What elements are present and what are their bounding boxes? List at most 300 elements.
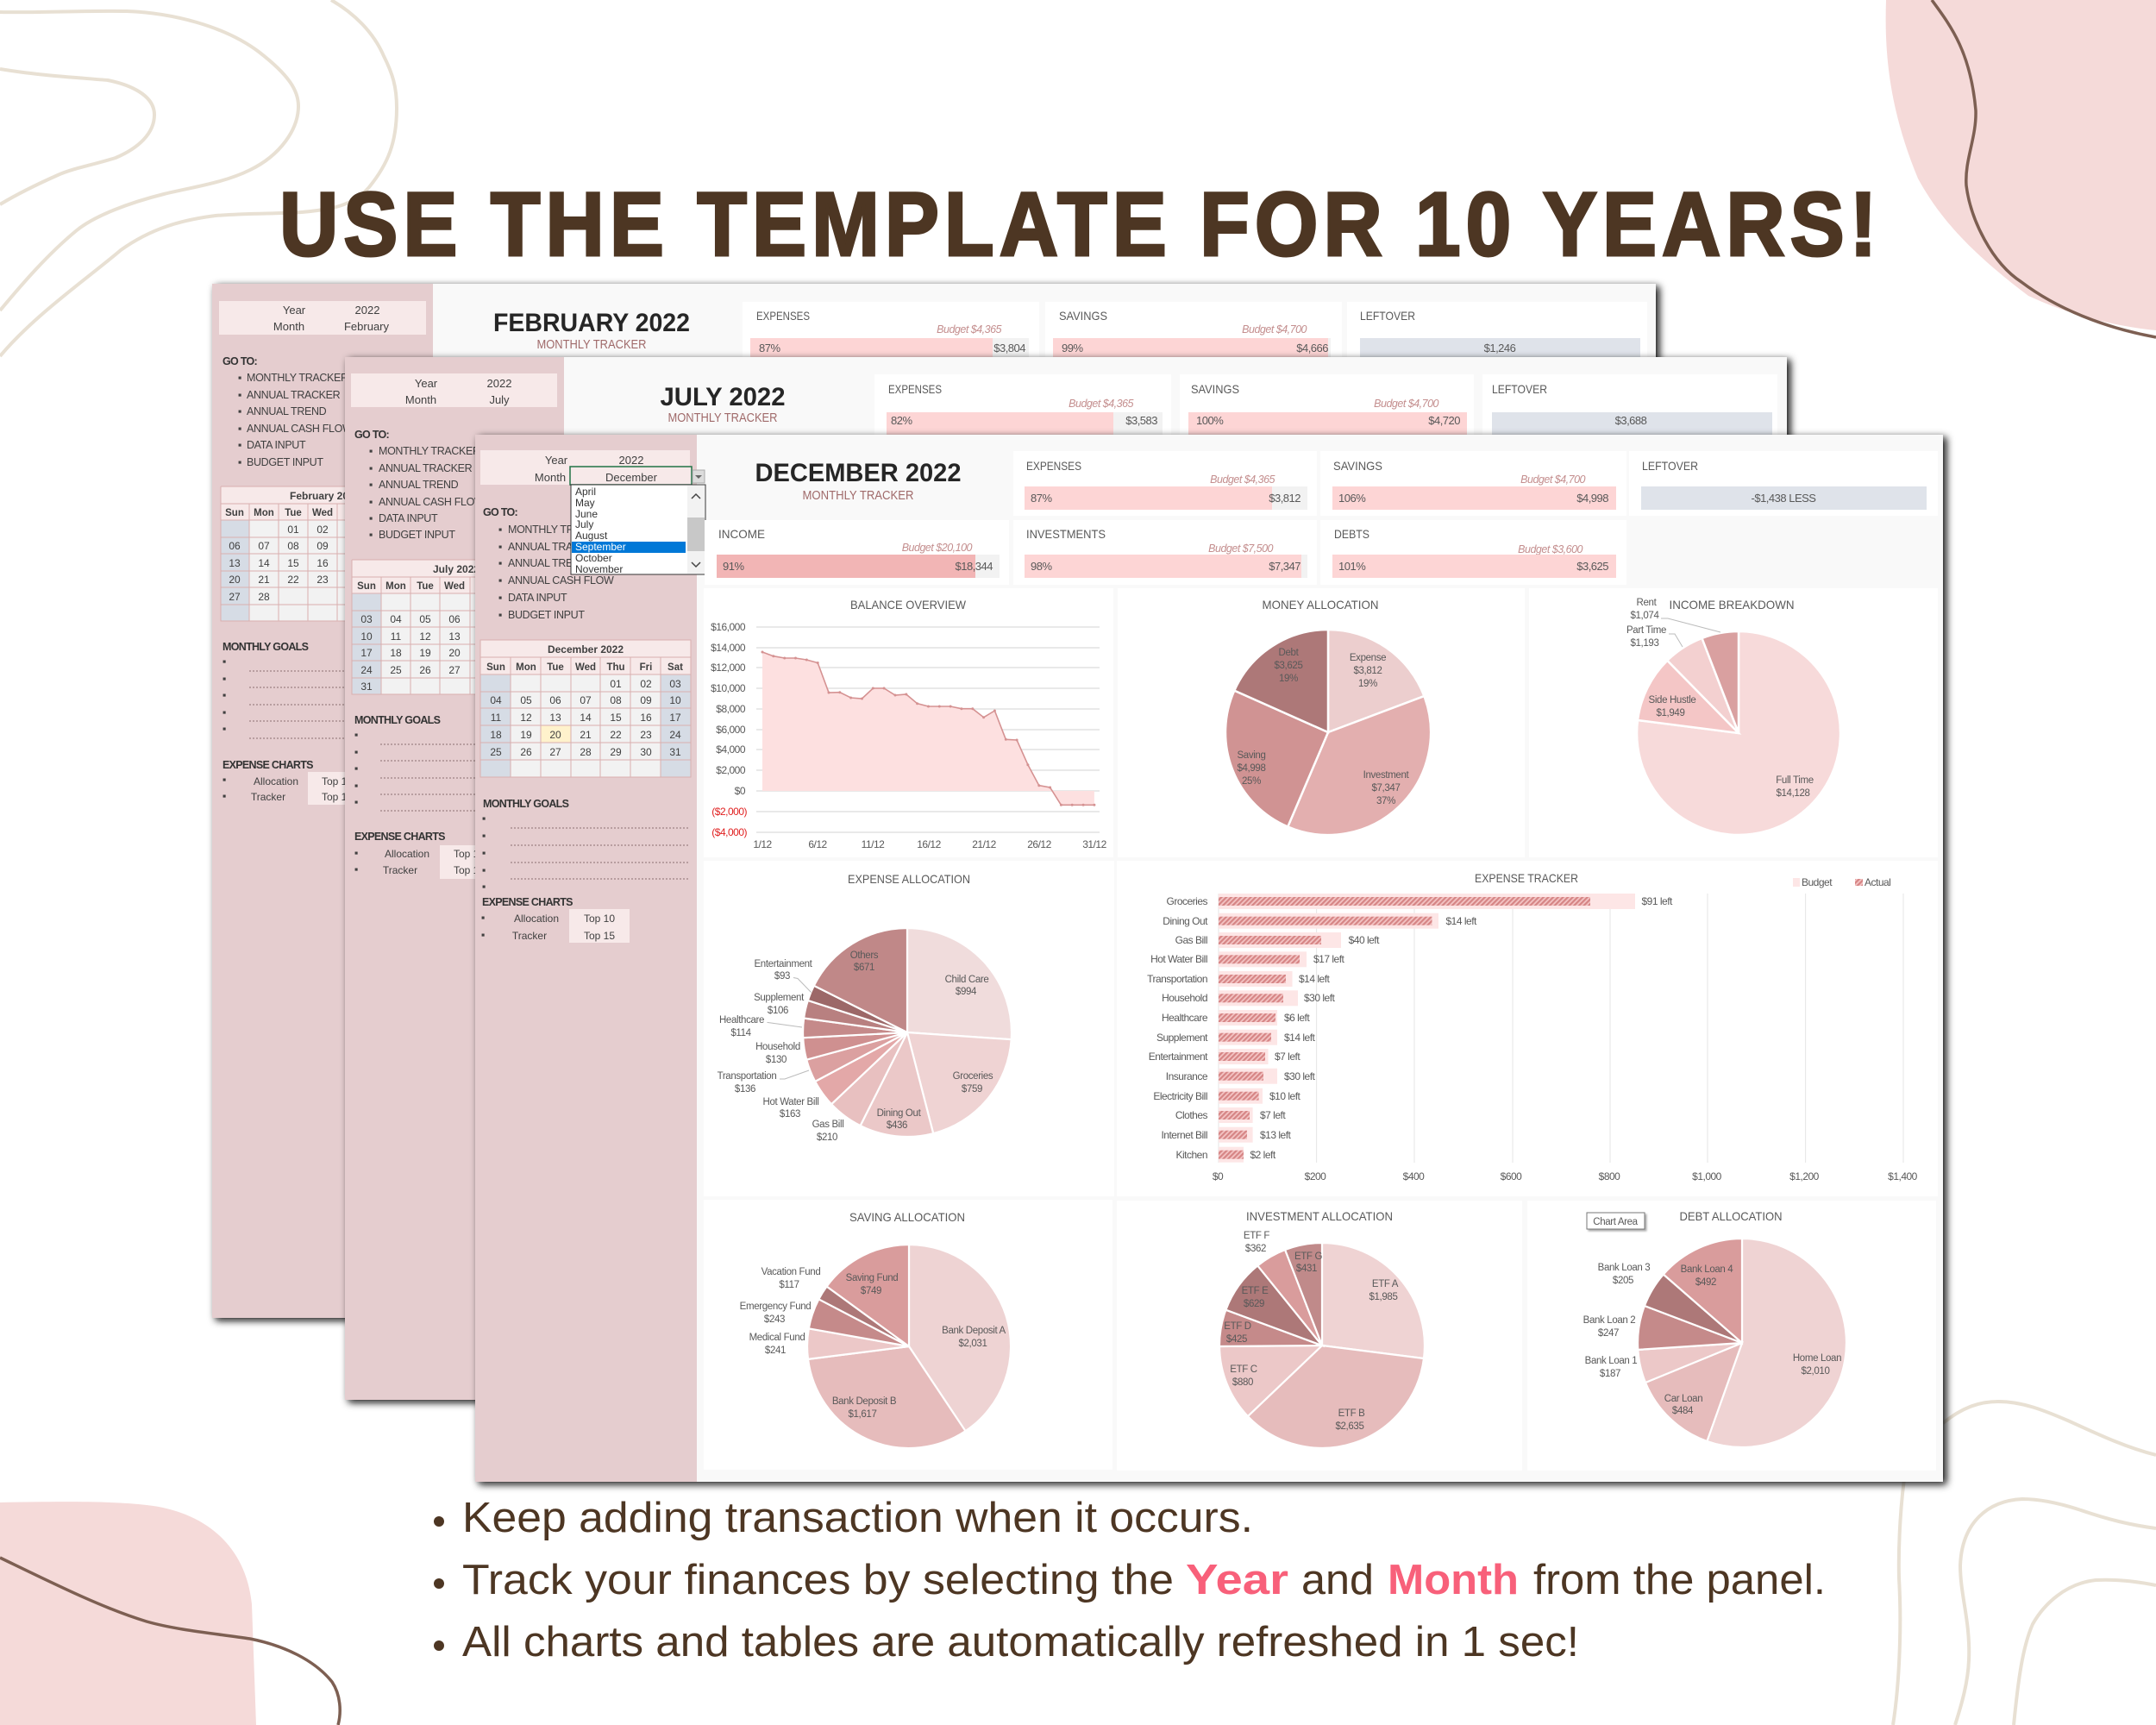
expense labels: $163 <box>780 1109 800 1120</box>
balance y axis: $2,000 <box>716 764 746 776</box>
saving labels: $1,617 <box>848 1409 877 1420</box>
february goals and expense charts links: ▪ <box>222 689 226 701</box>
july goals and expense charts links: MONTHLY GOALS <box>354 714 441 726</box>
february sidebar: ANNUAL CASH FLOW <box>247 423 353 435</box>
july sidebar: ▪ <box>369 462 373 474</box>
july KPI cards: EXPENSES <box>888 382 942 396</box>
bullet 2 <box>434 1557 1826 1603</box>
expense labels: Household <box>755 1042 800 1052</box>
tracker x axis: $1,400 <box>1888 1170 1918 1182</box>
card: savings: Budget $4,700 <box>1520 474 1586 486</box>
tracker category labels: Hot Water Bill <box>1150 953 1207 965</box>
july KPI cards: 100% <box>1196 414 1224 427</box>
tracker legend: Budget <box>1802 876 1833 888</box>
income labels: $1,949 <box>1656 708 1685 718</box>
february calendar: 28 <box>258 591 270 603</box>
balance y axis: ($2,000) <box>711 806 747 818</box>
tracker category labels: Dining Out <box>1163 915 1208 927</box>
expense charts links <box>481 896 630 943</box>
chart: money allocation: MONEY ALLOCATION <box>1263 598 1378 612</box>
chart: income breakdown <box>1529 588 1938 857</box>
expense labels: $994 <box>956 987 977 997</box>
february sidebar: ANNUAL TRACKER <box>247 389 341 401</box>
december calendar: 02 <box>640 678 652 690</box>
february goals and expense charts links: Tracker <box>251 791 285 803</box>
february goals and expense charts links <box>222 641 354 805</box>
july calendar: 26 <box>419 664 431 676</box>
monthly goals: ▪ <box>482 812 486 825</box>
december calendar: 03 <box>669 678 681 690</box>
expense labels: $106 <box>768 1006 788 1016</box>
debt labels: $2,010 <box>1801 1366 1830 1377</box>
card: expenses: $3,812 <box>1269 492 1300 505</box>
tracker category labels: Internet Bill <box>1161 1129 1207 1141</box>
expense labels: $136 <box>735 1084 755 1095</box>
background: bottom left pink blob <box>0 1502 256 1725</box>
february calendar: 08 <box>287 540 299 552</box>
card: savings: 106% <box>1338 492 1366 505</box>
saving labels: $117 <box>779 1280 799 1290</box>
income labels <box>1626 598 1814 799</box>
expense charts links: ▪ <box>481 929 485 941</box>
february sidebar: Month <box>273 320 304 333</box>
february goals and expense charts links: Top 10 <box>322 775 353 787</box>
july sidebar: ▪ <box>369 512 373 524</box>
july sidebar: MONTHLY TRACKER <box>379 445 480 457</box>
balance y axis: $16,000 <box>711 621 746 633</box>
card: expenses <box>1013 451 1317 516</box>
february calendar: 15 <box>287 557 299 569</box>
card: income: INCOME <box>718 527 765 541</box>
expense labels: $759 <box>962 1084 982 1095</box>
money labels: Debt <box>1279 648 1300 658</box>
tracker amount left labels: $7 left <box>1260 1109 1286 1121</box>
tracker amount left labels: $6 left <box>1284 1012 1310 1024</box>
card: investments <box>1013 520 1317 585</box>
december calendar: 31 <box>669 746 681 758</box>
tracker amount left labels: $30 left <box>1304 992 1336 1004</box>
tracker amount left labels: $40 left <box>1349 934 1380 946</box>
december sidebar <box>475 435 697 1482</box>
july KPI cards: $3,688 <box>1615 414 1647 427</box>
card: expenses: EXPENSES <box>1026 459 1081 473</box>
february calendar: 20 <box>229 574 241 586</box>
february calendar: 21 <box>258 574 270 586</box>
february sidebar: 2022 <box>355 304 379 317</box>
chart: expense tracker <box>1117 861 1938 1196</box>
chart area tooltip: Chart Area <box>1593 1217 1639 1227</box>
july calendar: Wed <box>444 581 465 592</box>
december calendar: 12 <box>520 712 532 724</box>
february KPI cards: 99% <box>1062 342 1083 354</box>
saving labels: Vacation Fund <box>761 1267 820 1277</box>
december calendar: Thu <box>606 662 625 673</box>
card: savings: SAVINGS <box>1333 459 1382 473</box>
card: investments: Budget $7,500 <box>1208 543 1274 555</box>
february goals and expense charts links: ▪ <box>222 656 226 668</box>
tracker amount left labels: $14 left <box>1284 1032 1316 1044</box>
tracker category labels: Insurance <box>1166 1070 1208 1082</box>
tracker x axis: $800 <box>1599 1170 1620 1182</box>
july sidebar: ▪ <box>369 445 373 457</box>
expense labels: $671 <box>854 963 874 973</box>
july calendar: 19 <box>419 647 431 659</box>
tracker category labels: Household <box>1162 992 1207 1004</box>
year and month selector: December <box>605 471 658 484</box>
chart: saving allocation <box>704 1200 1112 1470</box>
july calendar: 03 <box>360 613 373 625</box>
panel: December 2022 sheet <box>475 435 1943 1482</box>
july calendar: 11 <box>391 630 402 643</box>
december calendar: 05 <box>520 694 532 706</box>
expense labels: Entertainment <box>754 959 813 969</box>
july sidebar: ▪ <box>369 529 373 541</box>
card: expenses: Budget $4,365 <box>1210 474 1275 486</box>
july KPI cards <box>874 374 1777 435</box>
debt labels: $205 <box>1613 1276 1633 1286</box>
tracker legend <box>1793 876 1890 888</box>
balance x axis: 31/12 <box>1082 838 1107 850</box>
february KPI cards: LEFTOVER <box>1360 309 1415 323</box>
expense labels: $114 <box>730 1028 752 1038</box>
debt pie <box>1638 1239 1846 1447</box>
expense labels: Groceries <box>953 1071 993 1082</box>
saving labels: Bank Deposit B <box>832 1396 897 1407</box>
february goals and expense charts links: ▪ <box>222 790 226 802</box>
tracker amount left labels: $7 left <box>1275 1051 1300 1063</box>
expense labels: Hot Water Bill <box>763 1097 818 1107</box>
february calendar: 27 <box>229 591 241 603</box>
expense labels: Transportation <box>718 1071 776 1082</box>
expense labels <box>718 950 993 1143</box>
bullet 2: Year <box>1186 1557 1288 1603</box>
balance y axis: $6,000 <box>716 724 746 736</box>
february KPI cards: $4,666 <box>1296 342 1328 354</box>
background: bottom right beige contour lines <box>1893 1402 2156 1725</box>
february sidebar: DATA INPUT <box>247 439 306 451</box>
income labels: $14,128 <box>1776 788 1810 799</box>
year and month selector: 2022 <box>619 454 643 467</box>
go to links: ANNUAL TREND <box>508 557 588 569</box>
july goals and expense charts links: Top 10 <box>454 848 485 860</box>
december calendar: 11 <box>491 712 502 724</box>
bullet 2: Track your finances by selecting the <box>462 1557 1174 1603</box>
investment pie <box>1219 1243 1425 1448</box>
july calendar: 17 <box>360 647 373 659</box>
december calendar: 08 <box>610 694 622 706</box>
july sidebar: Month <box>405 393 436 406</box>
card: savings: $4,998 <box>1576 492 1608 505</box>
background: bottom left brown curve <box>0 1558 340 1725</box>
saving labels: Emergency Fund <box>740 1302 811 1312</box>
card: debts: $3,625 <box>1576 560 1608 573</box>
panel: July 2022 sheet <box>345 357 1787 1400</box>
december calendar: 04 <box>490 694 502 706</box>
february sidebar <box>212 284 433 1318</box>
tracker x axis: $600 <box>1501 1170 1522 1182</box>
july goals and expense charts links: Top 15 <box>454 864 485 876</box>
income leader lines <box>1661 618 1720 647</box>
february calendar <box>221 486 360 621</box>
february sidebar: MONTHLY TRACKER <box>247 372 348 384</box>
july KPI cards: $4,720 <box>1428 414 1460 427</box>
december title block <box>755 459 961 503</box>
december calendar: Fri <box>640 662 652 673</box>
debt labels: Bank Loan 1 <box>1585 1356 1637 1366</box>
chart: income breakdown: INCOME BREAKDOWN <box>1670 598 1794 612</box>
balance x axis: 11/12 <box>862 838 885 850</box>
money labels: $4,998 <box>1237 763 1266 774</box>
chart: expense allocation <box>704 861 1114 1196</box>
december calendar: 25 <box>490 746 502 758</box>
july calendar: Mon <box>385 581 406 592</box>
investment labels: ETF E <box>1242 1286 1269 1296</box>
chart: expense tracker: EXPENSE TRACKER <box>1475 871 1578 885</box>
card: debts: Budget $3,600 <box>1518 543 1583 555</box>
bullet 2: from the panel. <box>1533 1557 1826 1603</box>
december calendar: Wed <box>575 662 596 673</box>
money labels: 19% <box>1358 679 1377 689</box>
card: income: Budget $20,100 <box>902 542 973 554</box>
july KPI cards: Budget $4,365 <box>1069 398 1134 410</box>
july calendar: 12 <box>419 630 431 643</box>
july sidebar: 2022 <box>487 377 511 390</box>
july calendar: 24 <box>360 664 373 676</box>
background: top right brown curve <box>1932 0 2156 337</box>
february goals and expense charts links: MONTHLY GOALS <box>222 641 309 653</box>
saving labels: Saving Fund <box>846 1273 898 1283</box>
july goals and expense charts links: ▪ <box>354 863 358 875</box>
tracker actual bars <box>1219 897 1590 1159</box>
july sidebar: DATA INPUT <box>379 512 438 524</box>
debt labels: Home Loan <box>1793 1353 1841 1364</box>
debt labels: $187 <box>1600 1369 1620 1379</box>
tracker x axis: $1,000 <box>1692 1170 1722 1182</box>
saving labels <box>740 1267 1006 1420</box>
investment labels <box>1224 1231 1399 1432</box>
december calendar: 15 <box>610 712 622 724</box>
expense labels: Healthcare <box>719 1015 764 1026</box>
balance x axis <box>753 838 1107 850</box>
investment labels: ETF A <box>1372 1279 1399 1289</box>
february sidebar: February <box>344 320 390 333</box>
december calendar: Mon <box>516 662 536 673</box>
february sidebar: ▪ <box>238 372 241 384</box>
february calendar: Mon <box>254 508 274 518</box>
expense charts links: EXPENSE CHARTS <box>482 896 573 908</box>
july sidebar: ANNUAL TREND <box>379 479 459 491</box>
chart: investment allocation <box>1117 1201 1522 1471</box>
money labels: 25% <box>1242 776 1261 787</box>
tracker category labels: Kitchen <box>1175 1149 1207 1161</box>
february calendar: 13 <box>229 557 241 569</box>
expense charts links: ▪ <box>481 912 485 924</box>
february calendar: 09 <box>317 540 329 552</box>
money labels: 19% <box>1279 674 1298 684</box>
expense charts links: Tracker <box>512 930 547 942</box>
expense labels: Others <box>850 950 879 961</box>
december title block: DECEMBER 2022 <box>755 459 961 487</box>
income labels: $1,074 <box>1630 611 1659 621</box>
december title block: MONTHLY TRACKER <box>802 489 914 503</box>
debt labels: Bank Loan 4 <box>1681 1264 1733 1275</box>
chart: debt allocation <box>1527 1201 1936 1471</box>
february calendar: 16 <box>317 557 329 569</box>
investment labels: $1,985 <box>1369 1292 1398 1302</box>
chart: investment allocation: INVESTMENT ALLOCATION <box>1246 1209 1393 1223</box>
money labels: 37% <box>1376 796 1395 806</box>
investment labels: $2,635 <box>1335 1421 1364 1432</box>
month dropdown list: September <box>575 541 626 553</box>
monthly goals: ▪ <box>482 847 486 859</box>
card: investments: 98% <box>1031 560 1052 573</box>
february KPI cards <box>743 302 1647 357</box>
december calendar: 13 <box>549 712 561 724</box>
july sidebar: GO TO: <box>354 429 389 441</box>
investment labels: ETF B <box>1338 1408 1365 1419</box>
february sidebar: ▪ <box>238 405 241 417</box>
money labels: $3,625 <box>1274 661 1303 671</box>
december calendar: 24 <box>669 729 681 741</box>
year and month selector: Month <box>535 471 566 484</box>
tracker category labels: Electricity Bill <box>1153 1090 1207 1102</box>
expense labels: Gas Bill <box>812 1120 843 1130</box>
expense labels: Child Care <box>945 975 988 985</box>
card: investments: $7,347 <box>1269 560 1300 573</box>
december calendar: 22 <box>610 729 622 741</box>
saving labels: $243 <box>764 1314 785 1325</box>
december calendar: 17 <box>669 712 681 724</box>
february sidebar: Year <box>283 304 306 317</box>
investment labels: ETF F <box>1244 1231 1269 1241</box>
month dropdown list: May <box>575 497 595 509</box>
go to links: MONTHLY TRACKER <box>508 524 610 536</box>
july sidebar: ANNUAL TRACKER <box>379 462 473 474</box>
bullet 2: and <box>1301 1557 1374 1603</box>
debt labels: Bank Loan 2 <box>1583 1315 1635 1326</box>
july goals and expense charts links: ▪ <box>354 780 358 792</box>
balance area <box>762 652 1094 805</box>
february calendar: Wed <box>312 508 333 518</box>
july KPI cards: $3,583 <box>1125 414 1157 427</box>
expense labels: Supplement <box>754 993 805 1003</box>
debt labels: Bank Loan 3 <box>1598 1263 1650 1273</box>
july calendar: 25 <box>390 664 402 676</box>
july calendar <box>352 560 490 694</box>
february KPI cards: $1,246 <box>1484 342 1516 354</box>
debt labels: $484 <box>1672 1406 1694 1416</box>
balance y axis: $4,000 <box>716 743 746 756</box>
february calendar: 07 <box>258 540 270 552</box>
investment labels: ETF G <box>1294 1251 1322 1262</box>
bullet 1: Keep adding transaction when it occurs. <box>462 1495 1253 1541</box>
investment labels: $425 <box>1226 1334 1247 1345</box>
july goals and expense charts links: EXPENSE CHARTS <box>354 831 445 843</box>
monthly goals <box>482 798 689 893</box>
tracker amount left labels: $10 left <box>1269 1090 1301 1102</box>
card: debts: 101% <box>1338 560 1366 573</box>
july calendar: 18 <box>390 647 402 659</box>
monthly goals: ▪ <box>482 830 486 842</box>
money pie <box>1225 630 1431 835</box>
tracker category labels <box>1147 895 1208 1161</box>
tracker category labels: Transportation <box>1147 973 1207 985</box>
february goals and expense charts links: ▪ <box>222 706 226 718</box>
saving pie <box>807 1245 1011 1448</box>
december calendar: 28 <box>580 746 592 758</box>
expense charts links: Top 15 <box>584 930 615 942</box>
july calendar: 20 <box>448 647 461 659</box>
february calendar: Sun <box>225 508 244 518</box>
investment labels: $431 <box>1296 1264 1317 1274</box>
income pie <box>1637 631 1840 835</box>
balance x axis: 26/12 <box>1027 838 1052 850</box>
balance y axis <box>711 621 747 838</box>
july calendar: 31 <box>360 681 373 693</box>
go to links <box>483 506 614 621</box>
february KPI cards: $3,804 <box>993 342 1025 354</box>
tracker amount left labels: $14 left <box>1299 973 1331 985</box>
tracker category labels: Gas Bill <box>1175 934 1207 946</box>
february calendar: 23 <box>317 574 329 586</box>
expense charts links: Allocation <box>514 913 559 925</box>
go to links: BUDGET INPUT <box>508 609 585 621</box>
february sidebar: ▪ <box>238 456 241 468</box>
july goals and expense charts links: Allocation <box>385 848 429 860</box>
month dropdown list: July <box>575 518 593 530</box>
money labels: $3,812 <box>1353 666 1382 676</box>
february KPI cards: Budget $4,365 <box>937 323 1002 336</box>
balance y axis: $0 <box>735 785 746 797</box>
february calendar: 02 <box>317 524 329 536</box>
investment labels: ETF C <box>1230 1364 1257 1375</box>
saving labels: Bank Deposit A <box>942 1326 1006 1336</box>
saving labels: Medical Fund <box>749 1333 805 1343</box>
december calendar: Sun <box>486 662 505 673</box>
tracker amount left labels: $14 left <box>1445 915 1477 927</box>
february KPI cards: Budget $4,700 <box>1242 323 1307 336</box>
february sidebar: ANNUAL TREND <box>247 405 327 417</box>
bullet 2: Month <box>1388 1557 1519 1603</box>
title: USE THE TEMPLATE FOR 10 YEARS! <box>279 174 1877 275</box>
investment labels: $629 <box>1244 1299 1264 1309</box>
july calendar: 10 <box>360 630 373 643</box>
december calendar: 19 <box>520 729 532 741</box>
december calendar: 30 <box>640 746 652 758</box>
card: income: 91% <box>723 560 744 573</box>
july sidebar: ANNUAL CASH FLOW <box>379 496 485 508</box>
card: investments: INVESTMENTS <box>1026 527 1106 541</box>
go to links: ▪ <box>498 609 502 621</box>
february sidebar: ▪ <box>238 423 241 435</box>
expense labels: $93 <box>774 971 790 982</box>
bullet 3: All charts and tables are automatically refreshed in 1 sec! <box>462 1619 1579 1665</box>
december calendar: 23 <box>640 729 652 741</box>
july goals and expense charts links: ▪ <box>354 746 358 758</box>
february sidebar: ▪ <box>238 389 241 401</box>
year and month selector: Year <box>545 454 568 467</box>
july goals and expense charts links: Tracker <box>383 864 417 876</box>
july sidebar: ▪ <box>369 479 373 491</box>
debt labels: Car Loan <box>1664 1394 1702 1404</box>
chart: expense allocation: EXPENSE ALLOCATION <box>848 872 970 886</box>
balance y axis: $12,000 <box>711 662 746 674</box>
expense pie <box>803 928 1012 1137</box>
go to links: ▪ <box>498 592 502 604</box>
card: expenses: 87% <box>1031 492 1052 505</box>
income labels: Full Time <box>1776 775 1814 786</box>
money labels: $7,347 <box>1371 783 1401 794</box>
